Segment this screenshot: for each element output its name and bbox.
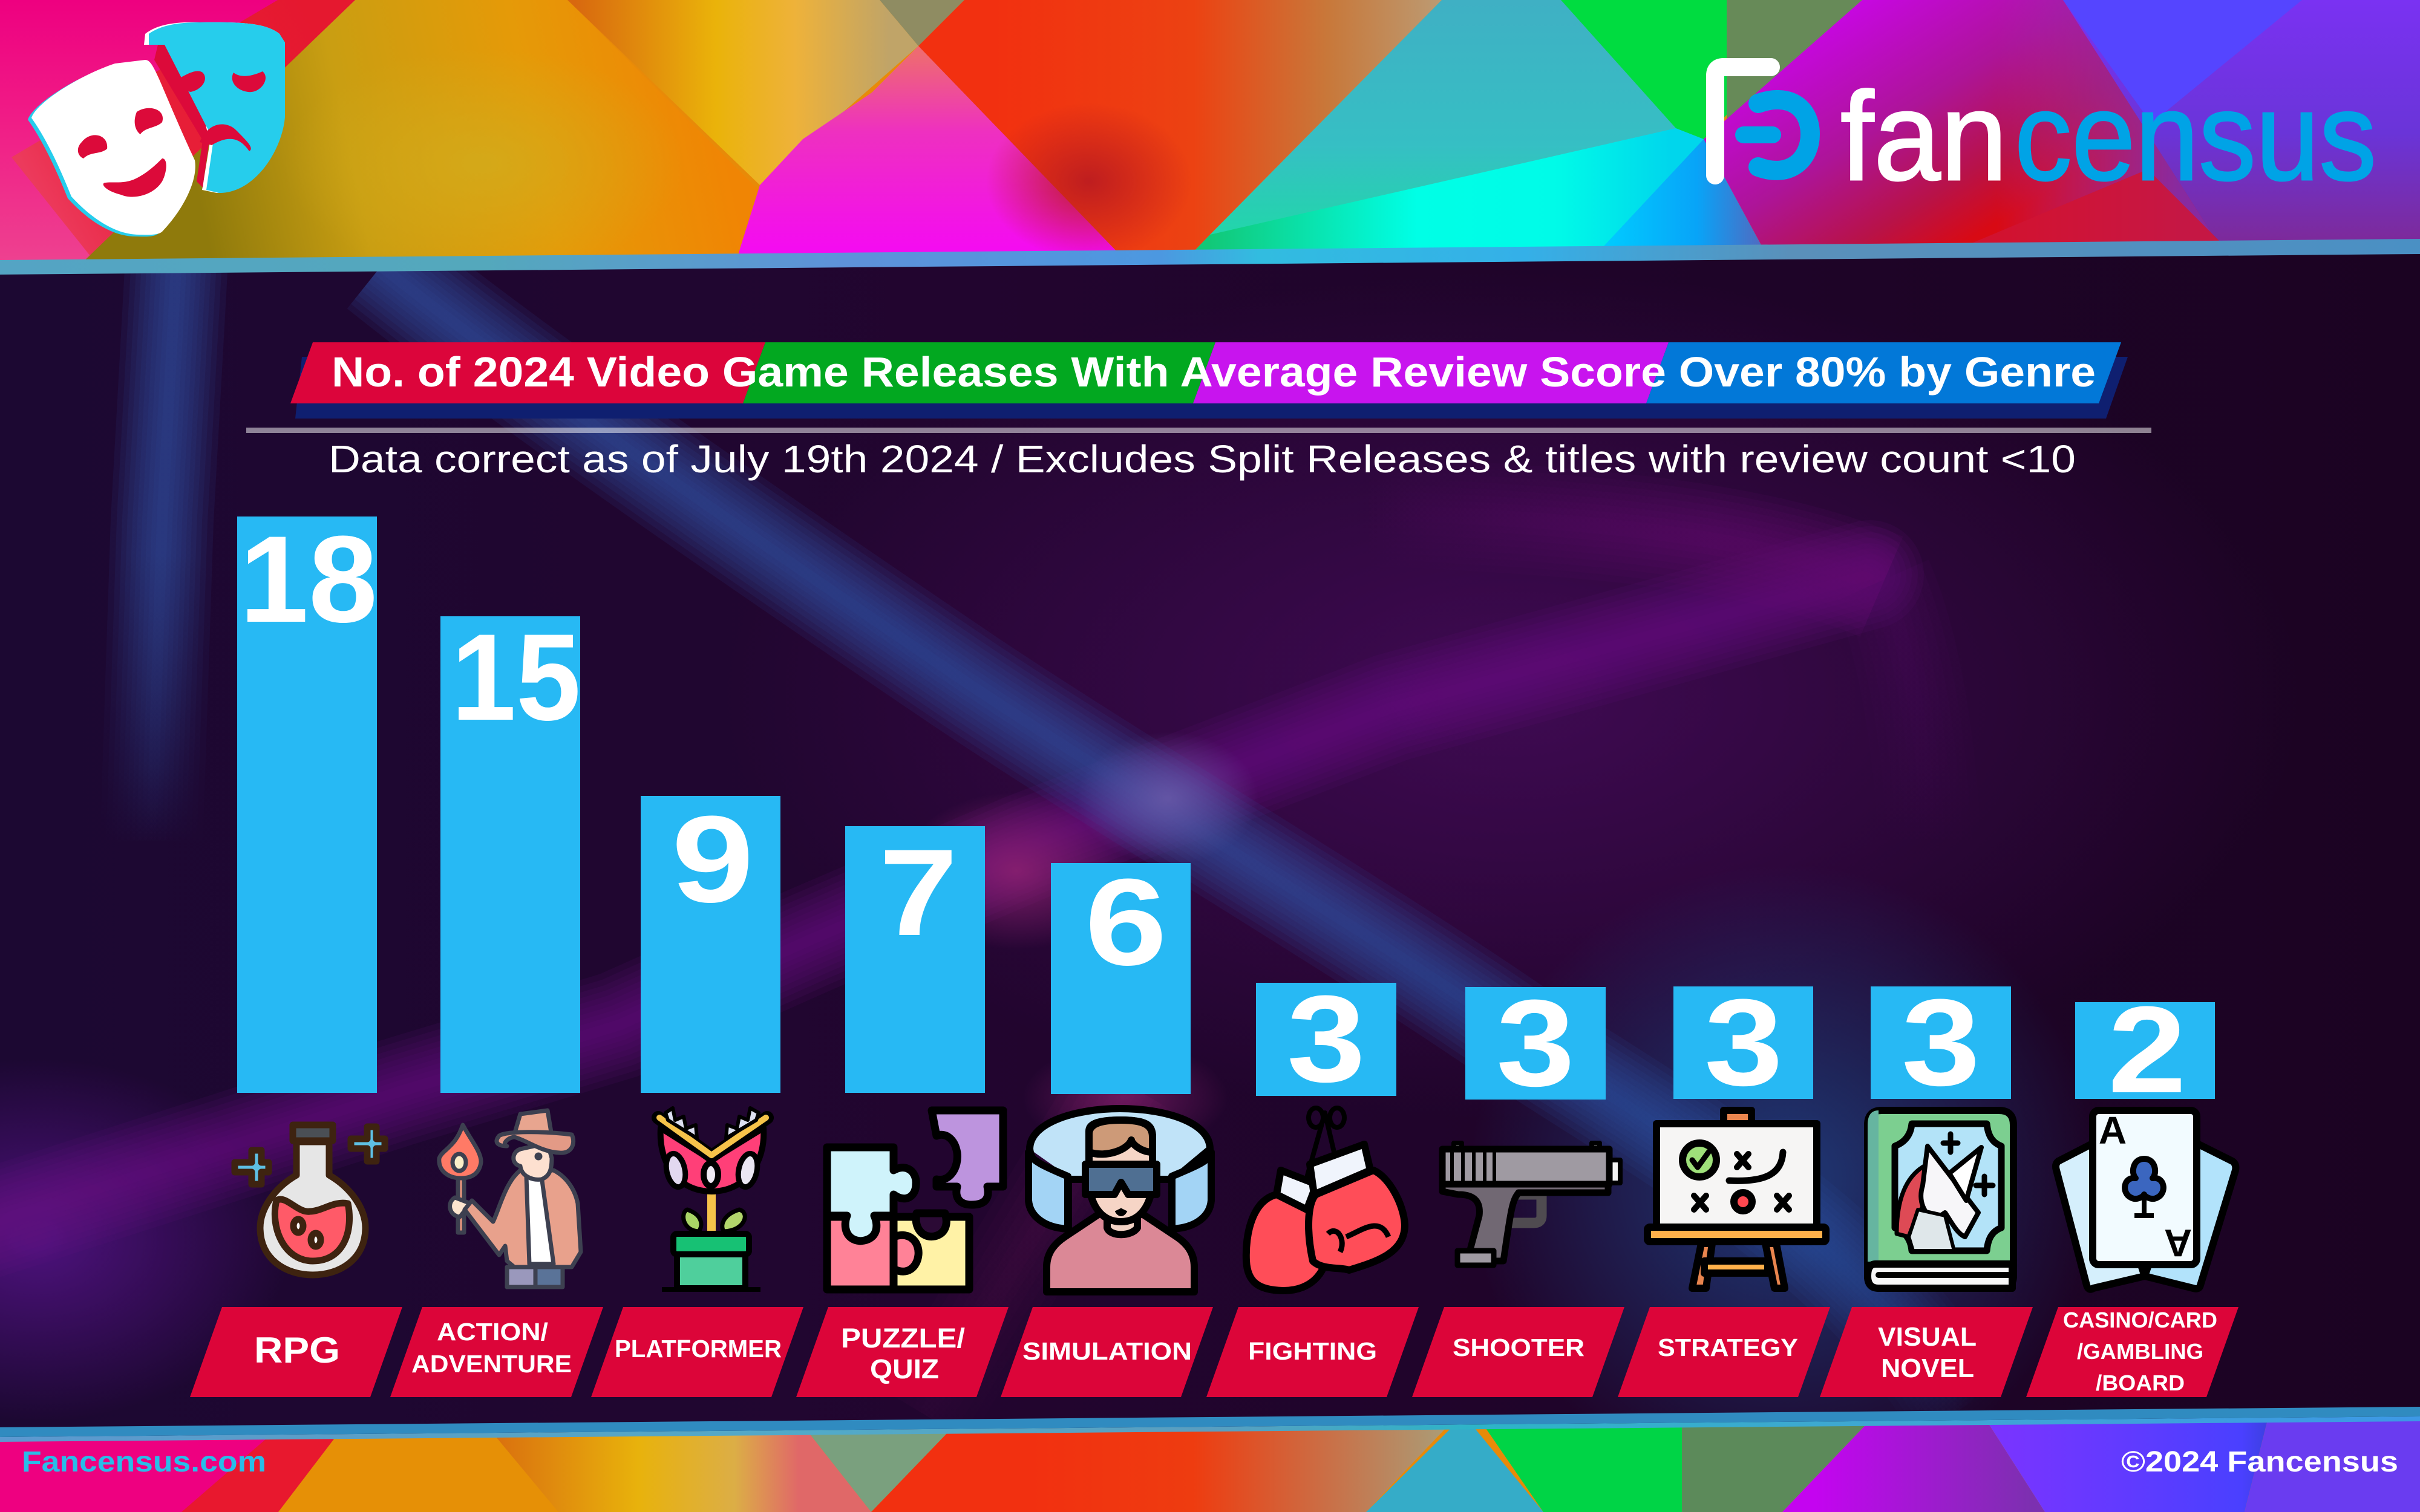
icon: pistol <box>1442 1143 1620 1265</box>
bar: Simulation 6: 6 <box>1085 853 1167 991</box>
bottom divider band <box>0 1407 2420 1442</box>
icon: potion <box>235 1125 385 1275</box>
icon: boxing gloves <box>1246 1108 1405 1291</box>
icon: playing cards: A <box>2164 1221 2192 1265</box>
label: RPG: RPG <box>254 1330 340 1370</box>
bar: Action/Adventure 15 <box>440 608 581 1093</box>
bar: Fighting 3: 3 <box>1287 970 1365 1108</box>
label: Casino/Card/Gambling/Board <box>2026 1307 2238 1397</box>
bar: Visual Novel 3: 3 <box>1902 974 1980 1112</box>
footer: copyright: ©2024 Fancensus <box>2121 1446 2398 1478</box>
label: Strategy: STRATEGY <box>1658 1334 1798 1361</box>
label: Fighting: FIGHTING <box>1248 1337 1377 1365</box>
bar: RPG 18 <box>237 510 378 1093</box>
bar: Strategy 3 <box>1673 974 1813 1112</box>
label: Puzzle/Quiz: QUIZ <box>870 1354 939 1384</box>
label: Action/Adventure: ACTION/ <box>437 1318 548 1346</box>
label: RPG <box>190 1307 402 1397</box>
label: Fighting <box>1206 1307 1419 1397</box>
bar: Puzzle/Quiz 7: 7 <box>879 824 958 962</box>
label: Casino/Card/Gambling/Board: /BOARD <box>2096 1370 2185 1395</box>
logo: fancensus <box>1715 67 2376 207</box>
bar: Shooter 3 <box>1465 974 1606 1112</box>
label: Action/Adventure <box>390 1307 603 1397</box>
bar: Casino 2 <box>2075 981 2215 1119</box>
bar: Simulation 6 <box>1051 853 1191 1094</box>
label: Action/Adventure: ADVENTURE <box>411 1350 572 1378</box>
bar: Visual Novel 3 <box>1871 974 2011 1112</box>
bar: Platformer 9: 9 <box>672 790 754 928</box>
subtitle: Data correct as of July 19th 2024 / Excludes Split Releases & titles with review count <10 <box>329 437 2076 481</box>
label: Visual Novel: VISUAL <box>1878 1322 1977 1352</box>
bar: Puzzle/Quiz 7 <box>845 824 985 1093</box>
label: Shooter: SHOOTER <box>1453 1334 1584 1361</box>
icon: piranha plant <box>658 1108 767 1292</box>
label: Visual Novel <box>1820 1307 2033 1397</box>
label: Casino/Card/Gambling/Board: /GAMBLING <box>2077 1339 2203 1364</box>
label: Casino/Card/Gambling/Board: CASINO/CARD <box>2063 1308 2217 1332</box>
icon: puzzle pieces <box>827 1110 1003 1289</box>
logo: fancensus: census <box>2015 67 2376 207</box>
label: Visual Novel: NOVEL <box>1881 1354 1974 1383</box>
bar: RPG 18: 18 <box>240 510 378 648</box>
bar chart <box>237 510 2215 1119</box>
label: Puzzle/Quiz <box>796 1307 1009 1397</box>
bar: Fighting 3 <box>1256 970 1396 1108</box>
genre labels <box>190 1307 2238 1397</box>
bar: Strategy 3: 3 <box>1704 974 1783 1112</box>
title banner: No. of 2024 Video Game Releases With Average Review Score Over 80% by Genre <box>332 348 2096 396</box>
bar: Platformer 9 <box>641 790 780 1093</box>
title banner <box>290 342 2128 419</box>
label: Puzzle/Quiz: PUZZLE/ <box>841 1323 966 1354</box>
label: Platformer <box>591 1307 803 1397</box>
icon: strategy easel <box>1647 1110 1826 1288</box>
bar: Shooter 3: 3 <box>1496 974 1575 1112</box>
label: Simulation: SIMULATION <box>1022 1337 1192 1365</box>
divider line under title <box>246 428 2151 433</box>
icon: unicorn visual novel book <box>1868 1110 2013 1288</box>
bottom colourful strip <box>0 1415 2420 1512</box>
footer: website: Fancensus.com <box>22 1446 266 1478</box>
icon: VR user <box>1028 1109 1211 1292</box>
top divider band <box>0 239 2420 275</box>
bar: Casino 2: 2 <box>2108 981 2186 1119</box>
top colourful strip <box>0 0 2420 278</box>
bar: Action/Adventure 15: 15 <box>451 608 581 746</box>
icon: theatre masks <box>28 22 285 236</box>
label: Platformer: PLATFORMER <box>615 1335 782 1363</box>
label: Simulation <box>1001 1307 1213 1397</box>
label: Strategy <box>1618 1307 1830 1397</box>
label: Shooter <box>1412 1307 1624 1397</box>
icon: adventurer with torch <box>439 1110 581 1287</box>
icon: playing cards: A <box>2099 1109 2127 1152</box>
icon: playing cards <box>2056 1109 2235 1289</box>
logo: fancensus: fan <box>1840 67 2007 207</box>
